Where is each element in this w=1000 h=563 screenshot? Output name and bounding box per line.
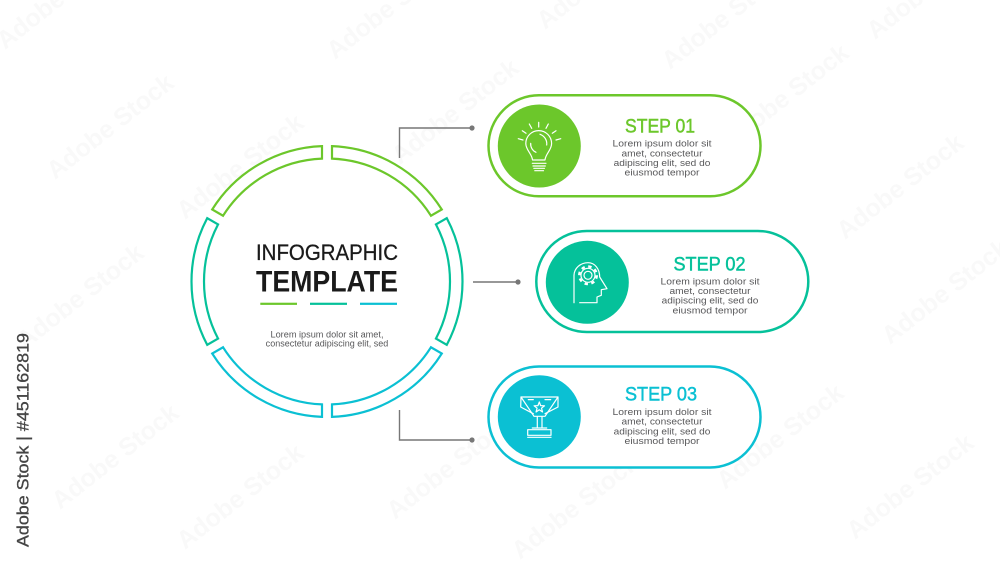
background watermarks: Adobe Stock	[506, 449, 644, 563]
background watermarks: Adobe Stock	[716, 39, 854, 155]
connector: step 03	[400, 410, 475, 443]
title: INFOGRAPHIC	[256, 240, 398, 265]
icon: light bulb	[518, 122, 561, 171]
connector: step 01	[400, 125, 475, 158]
step 01 heading: STEP 01	[625, 117, 695, 138]
background watermarks: Adobe Stock	[41, 69, 179, 185]
background watermarks: Adobe Stock	[381, 409, 519, 525]
step 03 text: Lorem ipsum dolor sit	[612, 407, 712, 417]
background watermarks: Adobe Stock	[11, 239, 149, 355]
step 02 heading: STEP 02	[674, 254, 746, 275]
center description: consectetur adipiscing elit, sed	[266, 339, 388, 349]
segmented ring	[191, 146, 463, 417]
background watermarks: Adobe Stock	[831, 129, 969, 245]
center description	[266, 330, 388, 349]
step 03 text: eiusmod tempor	[624, 436, 700, 446]
step 03 text	[612, 407, 712, 446]
step 03 text: adipiscing elit, sed do	[614, 426, 710, 436]
icon: head with gear	[574, 263, 607, 303]
connector: step 02	[473, 279, 521, 285]
step 01 text: amet, consectetur	[622, 148, 703, 158]
title underline dashes	[260, 303, 397, 305]
ring segment: bottom left	[212, 347, 322, 417]
ring segment: left	[191, 218, 218, 345]
step 02 text: eiusmod tempor	[672, 305, 748, 315]
title	[256, 240, 398, 299]
step 01 text: adipiscing elit, sed do	[614, 158, 710, 168]
center description: Lorem ipsum dolor sit amet,	[270, 330, 384, 340]
background watermarks: Adobe Stock	[171, 439, 309, 555]
ring segment: top right	[332, 146, 442, 216]
background watermarks: Adobe Stock	[46, 399, 184, 515]
background watermarks: Adobe Stock	[711, 379, 849, 495]
panel: step 03	[488, 366, 760, 468]
step 02 text: Lorem ipsum dolor sit	[660, 276, 760, 286]
step 03 text: amet, consectetur	[622, 417, 703, 427]
background watermarks: Adobe Stock	[171, 109, 309, 225]
background watermarks: Adobe Stock	[841, 429, 979, 545]
step 01 text: eiusmod tempor	[624, 168, 700, 178]
step 01 text	[612, 139, 712, 178]
ring segment: top left	[212, 146, 322, 216]
step 03 heading: STEP 03	[625, 385, 697, 406]
panel: step 01	[488, 95, 760, 196]
ring segment: bottom right	[332, 347, 442, 417]
step 01 text: Lorem ipsum dolor sit	[612, 139, 712, 149]
title: TEMPLATE	[256, 266, 398, 299]
step 02 text	[660, 276, 760, 315]
stock credit: Adobe Stock | #451162819	[14, 333, 32, 547]
step 02 text: amet, consectetur	[670, 286, 751, 296]
background watermarks: Adobe Stock	[386, 54, 524, 170]
icon: trophy	[521, 397, 558, 437]
panel: step 02	[536, 231, 808, 332]
step 02 text: adipiscing elit, sed do	[662, 296, 758, 306]
ring segment: right	[436, 218, 463, 345]
